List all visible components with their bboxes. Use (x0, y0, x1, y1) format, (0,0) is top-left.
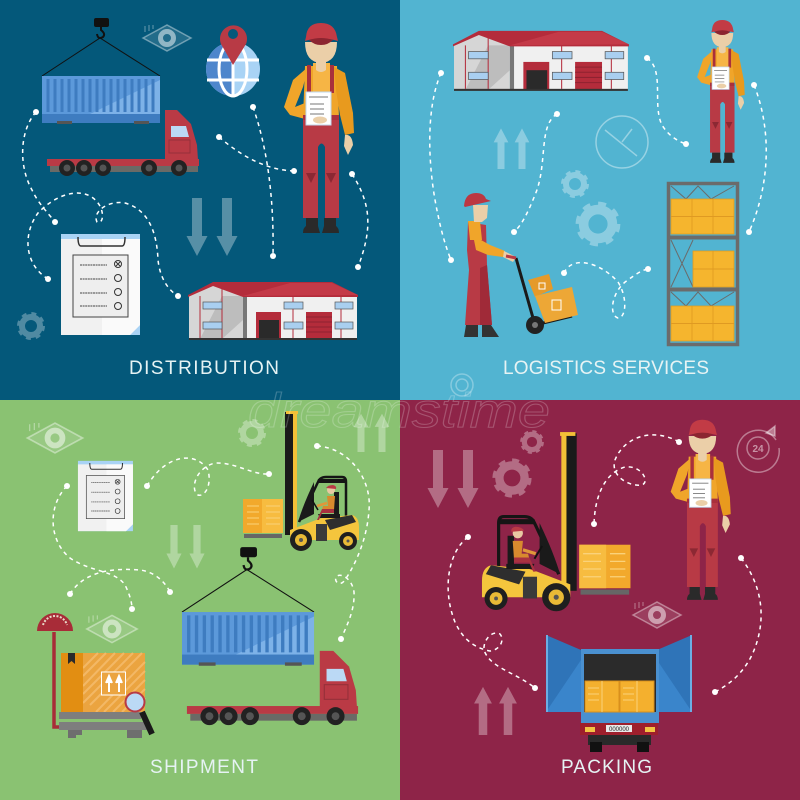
icon: down arrows (166, 525, 205, 568)
worker with clipboard (671, 420, 731, 600)
packing background (400, 400, 800, 800)
icon: large gear (578, 204, 618, 244)
icon: up arrows (354, 414, 389, 452)
icon: down arrows (428, 450, 478, 508)
heading: distribution: DISTRIBUTION (129, 358, 279, 379)
warehouse (453, 31, 629, 91)
dashed route d (250, 104, 276, 259)
panel: distribution (0, 0, 400, 400)
weighing scale with box (37, 613, 148, 738)
dashed route b (448, 534, 538, 691)
icon: up arrows (494, 128, 529, 169)
distribution background (0, 0, 400, 400)
icon: eye (143, 25, 191, 51)
watermark spiral (451, 374, 473, 396)
clipboard checklist (61, 234, 140, 335)
shipment background (0, 400, 400, 800)
icon: small gear (562, 172, 588, 196)
icon: eye (633, 602, 681, 628)
panel: logistics services (400, 0, 800, 400)
worker with clipboard (697, 20, 745, 163)
dashed route c (216, 134, 297, 174)
warehouse (188, 282, 358, 340)
dashed route e (561, 263, 651, 318)
delivery truck rear open (546, 635, 692, 752)
delivery truck rear open: 000000 (609, 727, 630, 733)
icon: large gear (494, 460, 530, 496)
forklift with pallet (482, 432, 630, 611)
dashed route c (712, 555, 761, 695)
forklift with pallet (243, 411, 359, 551)
dashed route e (349, 171, 368, 270)
clipboard checklist (78, 461, 133, 531)
icon: up arrows (474, 687, 517, 735)
worker pushing hand truck (464, 193, 578, 337)
icon: small gear (521, 431, 543, 453)
dashed route b (28, 193, 181, 299)
heading: packing: PACKING (561, 757, 652, 778)
icon: globe with location pin (206, 25, 260, 96)
dashed route a (430, 70, 454, 263)
icon: eye (27, 423, 83, 453)
shelf with boxes (668, 184, 738, 344)
icon: clock (596, 116, 648, 168)
watermark: dreamstime (248, 385, 550, 438)
flatbed truck (47, 110, 199, 176)
icon: gear (18, 314, 44, 338)
dashed route a (591, 435, 682, 527)
dashed route c (144, 458, 272, 495)
icon: eye near scale (87, 615, 137, 643)
icon: 24 hour clock: 24 (752, 444, 764, 455)
icon: down arrows (186, 198, 238, 256)
worker with clipboard (284, 23, 354, 233)
panel: shipment (0, 400, 400, 800)
icon: gear (240, 420, 264, 446)
dashed route a (53, 483, 135, 612)
dashed route c (644, 55, 689, 147)
container on crane hook (42, 18, 160, 124)
dashed route d (746, 82, 766, 235)
dashed route d (314, 443, 369, 642)
container on crane hook (182, 547, 314, 666)
icon: 24 hour clock (737, 426, 779, 472)
dashed route b (511, 111, 560, 235)
logistics background (400, 0, 800, 400)
heading: logistics services: LOGISTICS SERVICES (503, 358, 709, 379)
dashed route b (67, 569, 173, 597)
icon: magnifier (126, 692, 152, 734)
dashed route a (23, 109, 58, 225)
flatbed truck (187, 651, 358, 725)
panel: packing (400, 400, 800, 800)
heading: shipment: SHIPMENT (150, 757, 258, 778)
